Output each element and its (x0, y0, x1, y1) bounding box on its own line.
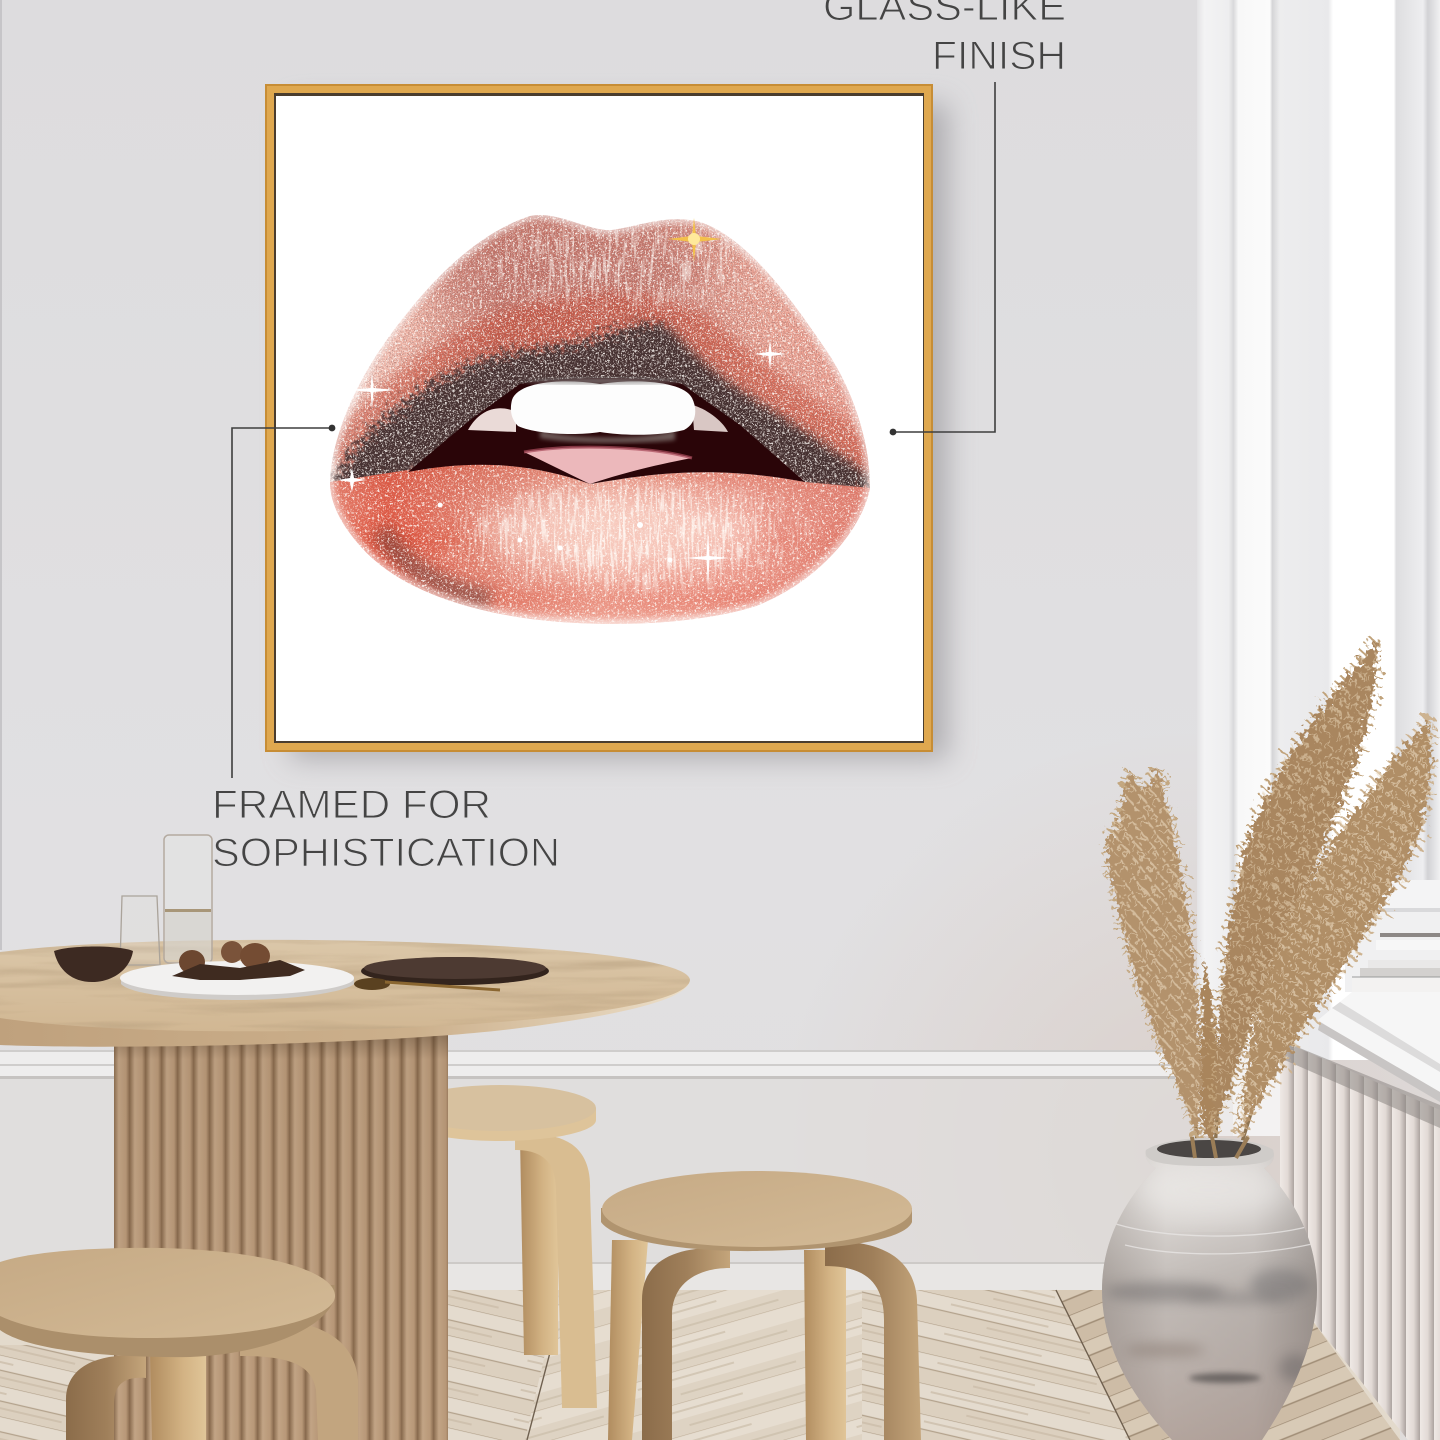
lips artwork (320, 205, 880, 630)
short plume (1201, 958, 1219, 1138)
callout: glass-like finish: FINISH (932, 34, 1066, 78)
mouth interior (408, 378, 805, 484)
left legs (608, 1240, 648, 1440)
left wall edge (0, 0, 2, 950)
window sill (1318, 992, 1440, 1102)
right legs (804, 1250, 846, 1440)
seat top (602, 1171, 912, 1247)
front stool (0, 1248, 358, 1440)
back stool (404, 1085, 597, 1408)
window and trim (1197, 0, 1440, 1136)
stems (1190, 1080, 1252, 1160)
radiator (1280, 1040, 1440, 1440)
ceramic vase (1100, 1130, 1320, 1440)
left plume (1106, 768, 1201, 1135)
white sparkles (338, 340, 786, 586)
gold star sparkle (668, 218, 722, 262)
glass carafe (164, 835, 212, 963)
stack of books on sill (1345, 912, 1440, 995)
spoon (354, 978, 500, 990)
artwork frame (265, 84, 948, 759)
dark bowl (54, 946, 133, 982)
callout: glass-like finish (823, 0, 1066, 435)
right plume (1240, 720, 1430, 1135)
soft lip edge (330, 215, 870, 624)
lower teeth hint (468, 408, 516, 432)
canvas (276, 96, 923, 741)
lower lip (330, 464, 870, 624)
seat edge (601, 1208, 912, 1251)
marble tray with chocolates (120, 941, 354, 1000)
frame shadow (290, 104, 948, 759)
gold frame (265, 84, 933, 752)
lower wall with moulding (0, 1050, 1200, 1290)
tongue (524, 447, 692, 484)
callout: framed for sophistication: SOPHISTICATION (212, 831, 560, 875)
drinking glass (120, 896, 160, 965)
upper teeth (511, 378, 695, 443)
dark wood plate (361, 957, 549, 985)
centre plume (1214, 640, 1378, 1130)
dark inner gap (274, 93, 924, 743)
pampas grass (1106, 640, 1430, 1160)
right stool (601, 1171, 921, 1440)
floor (0, 1290, 1400, 1440)
callout: framed for sophistication (212, 425, 560, 875)
round table pedestal (114, 1035, 448, 1440)
upper lip (320, 205, 880, 495)
round table top (0, 938, 692, 1047)
callout: framed for sophistication: FRAMED FOR (212, 783, 491, 827)
